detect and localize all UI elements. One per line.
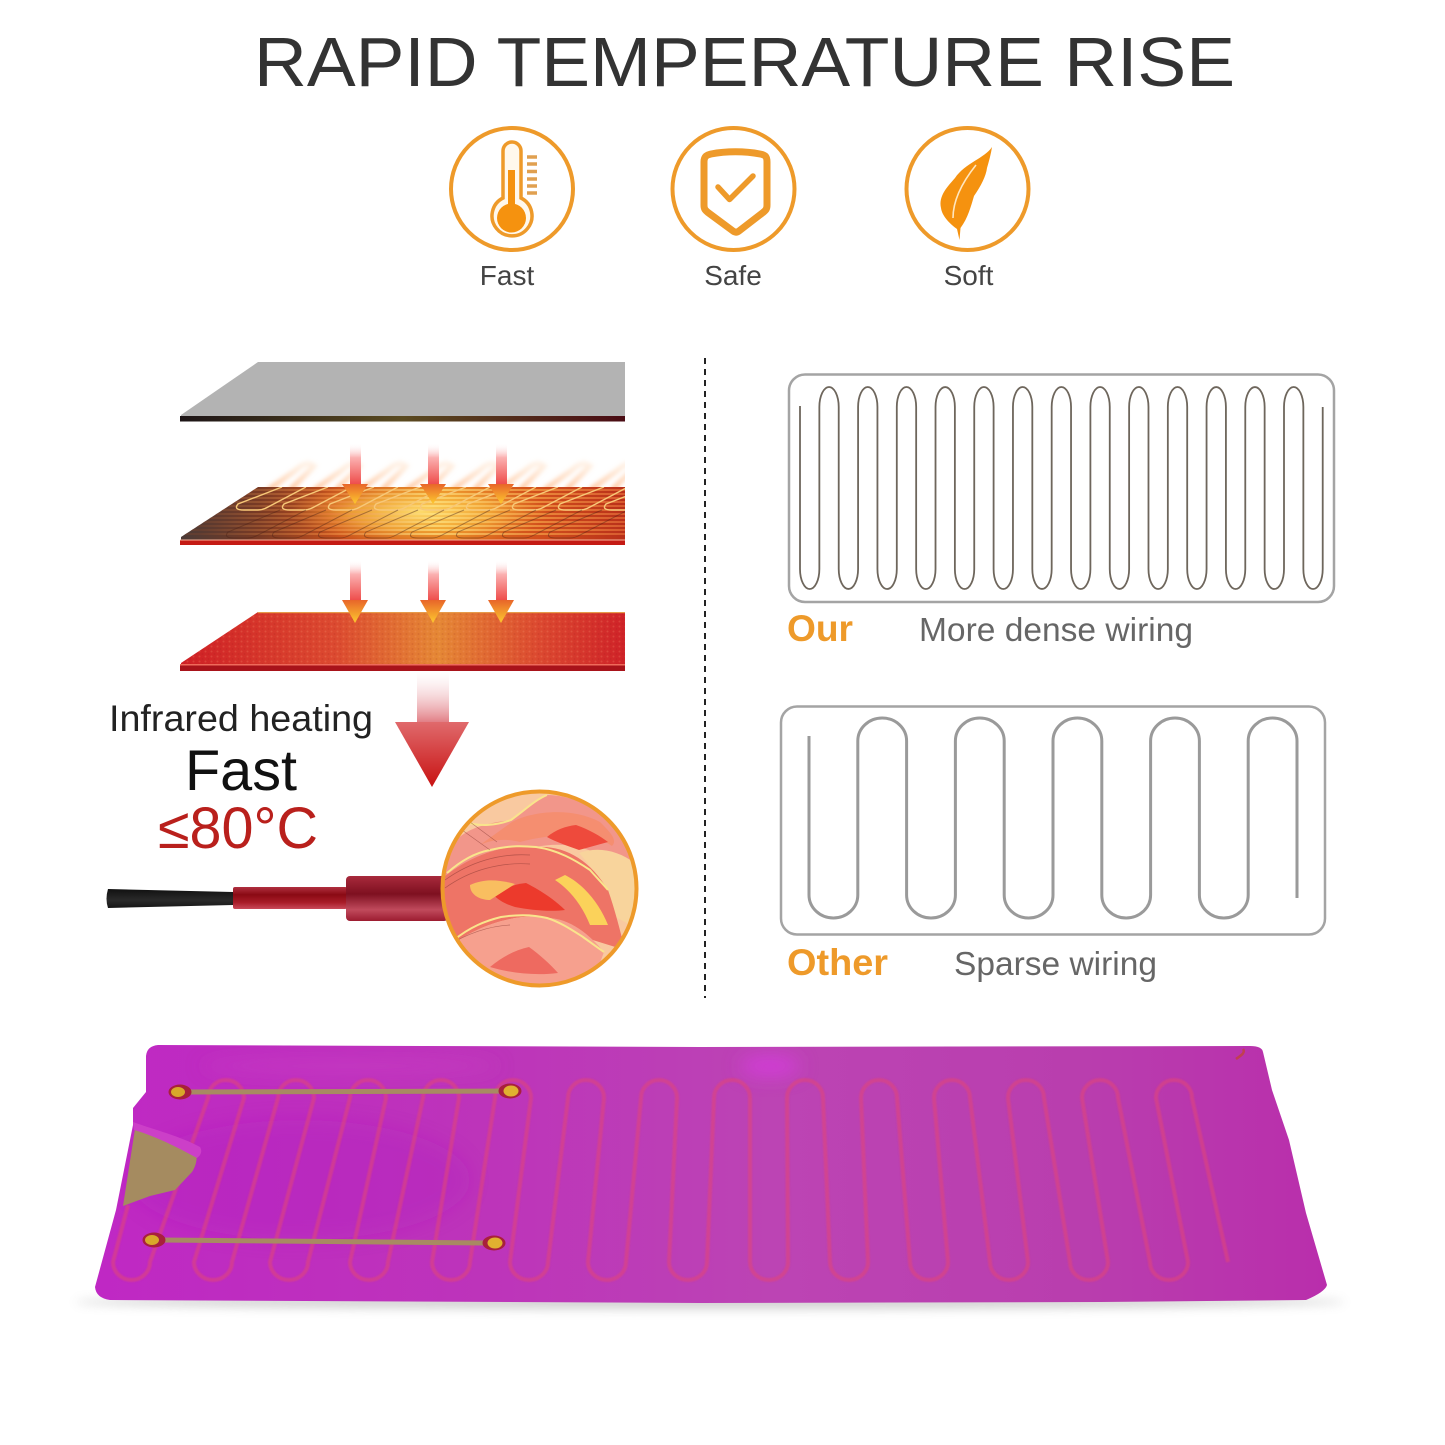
heating cable — [106, 876, 448, 921]
label: Soft: Soft — [944, 260, 994, 291]
mat highlights — [740, 1050, 800, 1082]
heating wire overlay — [113, 1080, 1228, 1280]
icon: thermometer — [451, 128, 573, 250]
top zipper — [168, 1084, 522, 1100]
text: infrared heating: ≤80°C — [158, 796, 318, 861]
layer: grey top sheet — [180, 362, 625, 422]
panel: our dense wiring — [787, 374, 1334, 649]
arrows: upper row — [342, 443, 514, 504]
icon: shield with check — [672, 128, 794, 250]
label: Fast: Fast — [480, 260, 534, 291]
text: infrared heating — [109, 697, 373, 861]
center dashed divider — [704, 358, 706, 998]
icon: feather — [906, 128, 1028, 250]
layer: red far-infrared sheet — [180, 612, 625, 671]
label: more dense wiring: More dense wiring — [919, 612, 1193, 649]
sauna blanket mat — [75, 1045, 1345, 1309]
feature icons row — [451, 128, 1028, 291]
sparse wire serpentine — [809, 718, 1297, 918]
label: sparse wiring: Sparse wiring — [954, 946, 1157, 983]
corner hook — [1236, 1049, 1244, 1059]
title: RAPID TEMPERATURE RISE — [254, 23, 1235, 101]
layer: heating wires sheet — [170, 464, 674, 545]
magnified cable detail circle — [440, 792, 640, 990]
label: our: Our — [787, 608, 853, 649]
dense wire serpentine — [800, 387, 1323, 589]
text: infrared heating: Infrared heating — [109, 697, 373, 739]
panel: other sparse wiring — [781, 706, 1325, 983]
arrow: large red down arrow — [395, 672, 469, 787]
text: infrared heating: Fast — [185, 739, 297, 803]
label: Safe: Safe — [704, 260, 762, 291]
bottom zipper — [142, 1232, 506, 1250]
arrows: lower row — [342, 560, 514, 623]
head flap opening — [123, 1122, 201, 1206]
mat body — [95, 1045, 1327, 1303]
label: other: Other — [787, 942, 888, 983]
